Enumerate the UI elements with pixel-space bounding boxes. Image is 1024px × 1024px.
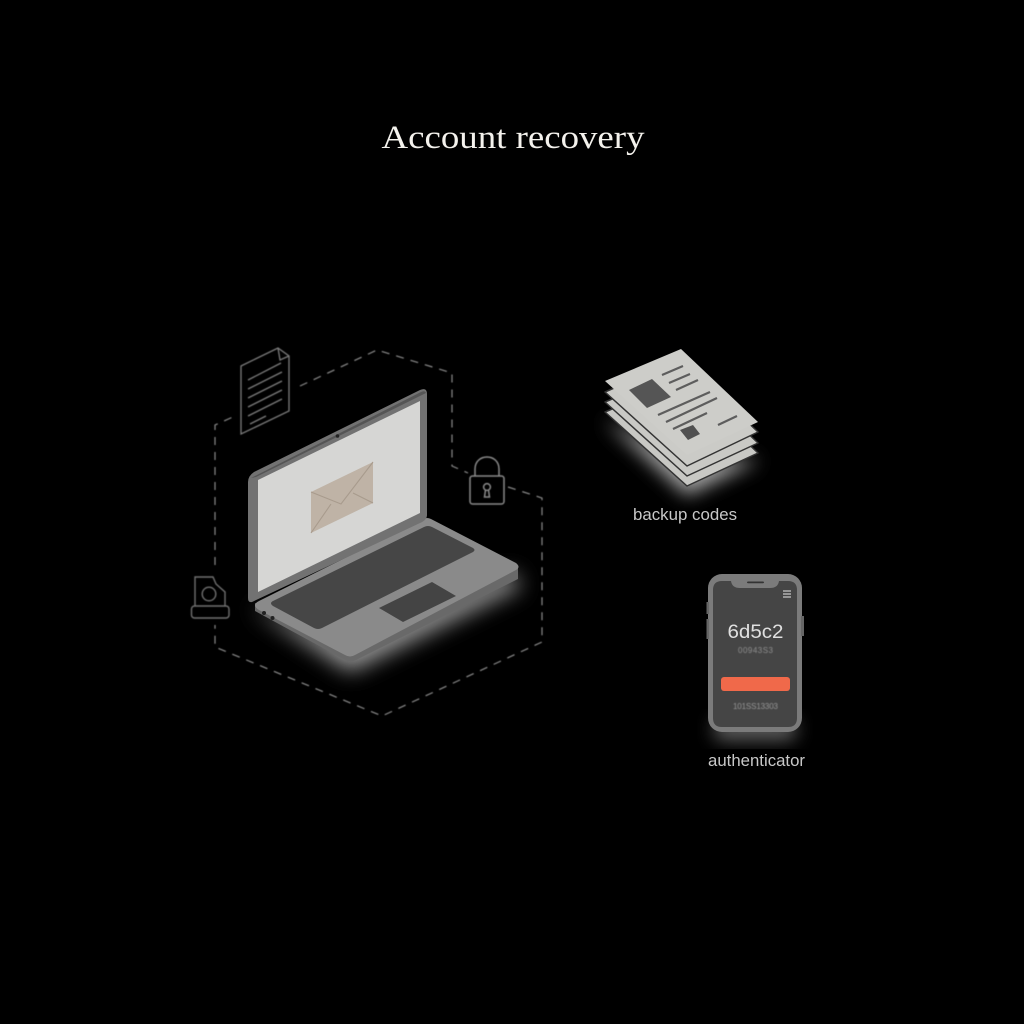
- laptop lid: [248, 389, 427, 602]
- laptop glow: [250, 572, 522, 672]
- dashed isometric outline: [215, 350, 542, 716]
- label: authenticator: authenticator: [708, 751, 805, 770]
- icon: document: [241, 348, 289, 434]
- paper sheets: [605, 349, 758, 486]
- orange button: [721, 677, 790, 691]
- phone screen: [713, 581, 797, 727]
- menu icon: [783, 591, 791, 597]
- stack glow: [604, 420, 760, 496]
- label: backup codes: backup codes: [633, 505, 737, 524]
- phone body: [708, 574, 802, 732]
- laptop: [248, 389, 522, 672]
- laptop base: [255, 518, 518, 662]
- icon: camera document: [192, 577, 229, 618]
- keyboard: [271, 526, 474, 629]
- backup codes paper stack: [604, 349, 760, 496]
- small footer code: 101SS13303: [733, 702, 779, 711]
- phone glow: [714, 718, 796, 740]
- title: Account recovery: [382, 120, 645, 156]
- code text: 6d5c2: [728, 622, 784, 643]
- authenticator phone: [706, 574, 804, 740]
- sheet content: [629, 366, 737, 440]
- icon: padlock: [470, 457, 504, 504]
- touchpad: [379, 582, 456, 622]
- laptop screen: [258, 401, 420, 592]
- small code text: 00943S3: [738, 646, 774, 655]
- envelope icon: [311, 462, 373, 533]
